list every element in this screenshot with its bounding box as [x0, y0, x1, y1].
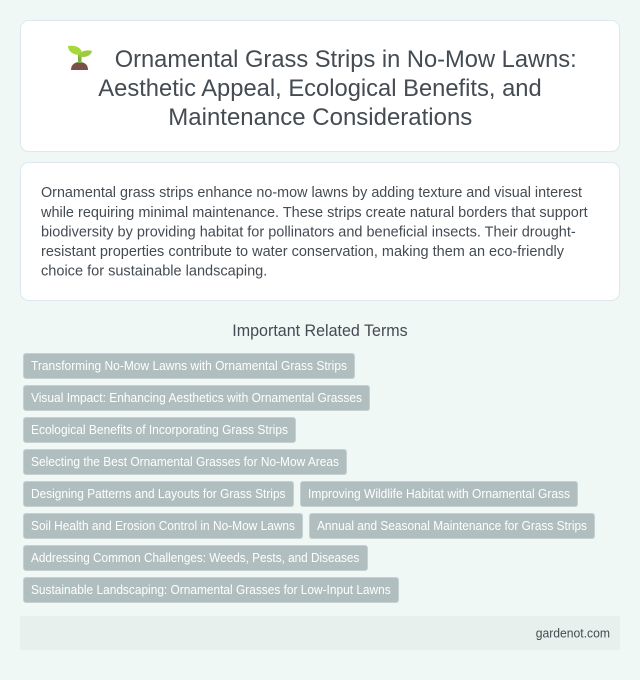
- text block: summary: choice for sustainable landscaping.: [41, 262, 267, 280]
- panel: related term tags: [24, 354, 594, 602]
- tag: Designing Patterns and Layouts for Grass Strips: [31, 487, 286, 501]
- tag: Improving Wildlife Habitat with Ornamental Grass: [308, 487, 570, 501]
- text block: summary: biodiversity by providing habitat for pollinators and beneficial insects. Their drought-: [41, 224, 576, 240]
- icon: seedling: [68, 46, 92, 70]
- tag: Ecological Benefits of Incorporating Grass Strips: [31, 423, 288, 437]
- tag: Sustainable Landscaping: Ornamental Grasses for Low-Input Lawns: [31, 583, 391, 597]
- text block: summary: Ornamental grass strips enhance no-mow lawns by adding texture and visual interest: [41, 184, 583, 201]
- tag: Soil Health and Erosion Control in No-Mow Lawns: [31, 519, 295, 533]
- tag: Addressing Common Challenges: Weeds, Pests, and Diseases: [31, 551, 359, 565]
- footer: [20, 616, 620, 650]
- tag: Visual Impact: Enhancing Aesthetics with Ornamental Grasses: [31, 391, 362, 405]
- tag: [24, 450, 346, 474]
- tag: [300, 482, 578, 506]
- tag: [24, 386, 370, 410]
- text block: summary: resistant properties contribute to water conservation, making them an eco-friendly: [41, 243, 564, 260]
- panel: summary card: [20, 162, 620, 300]
- tag: [24, 514, 302, 538]
- footer: gardenot.com: [536, 626, 610, 640]
- tag: Transforming No-Mow Lawns with Ornamental Grass Strips: [31, 359, 347, 373]
- tag: [24, 546, 368, 570]
- tag: [24, 578, 398, 602]
- title: Maintenance Considerations: [168, 104, 472, 131]
- tag: [24, 354, 354, 378]
- tag: Selecting the Best Ornamental Grasses for No-Mow Areas: [31, 455, 339, 469]
- tag: [310, 514, 594, 538]
- title: Ornamental Grass Strips in No-Mow Lawns:: [115, 46, 577, 73]
- heading: related terms: Important Related Terms: [232, 322, 408, 340]
- text block: summary: while requiring minimal maintenance. These strips create natural borders that support: [40, 204, 588, 221]
- title: [98, 46, 577, 131]
- tag: [24, 482, 294, 506]
- tag: Annual and Seasonal Maintenance for Grass Strips: [317, 519, 587, 533]
- panel: title card: [20, 20, 620, 152]
- title: Aesthetic Appeal, Ecological Benefits, and: [98, 75, 542, 102]
- tag: [24, 418, 296, 442]
- text block: summary: [40, 184, 588, 280]
